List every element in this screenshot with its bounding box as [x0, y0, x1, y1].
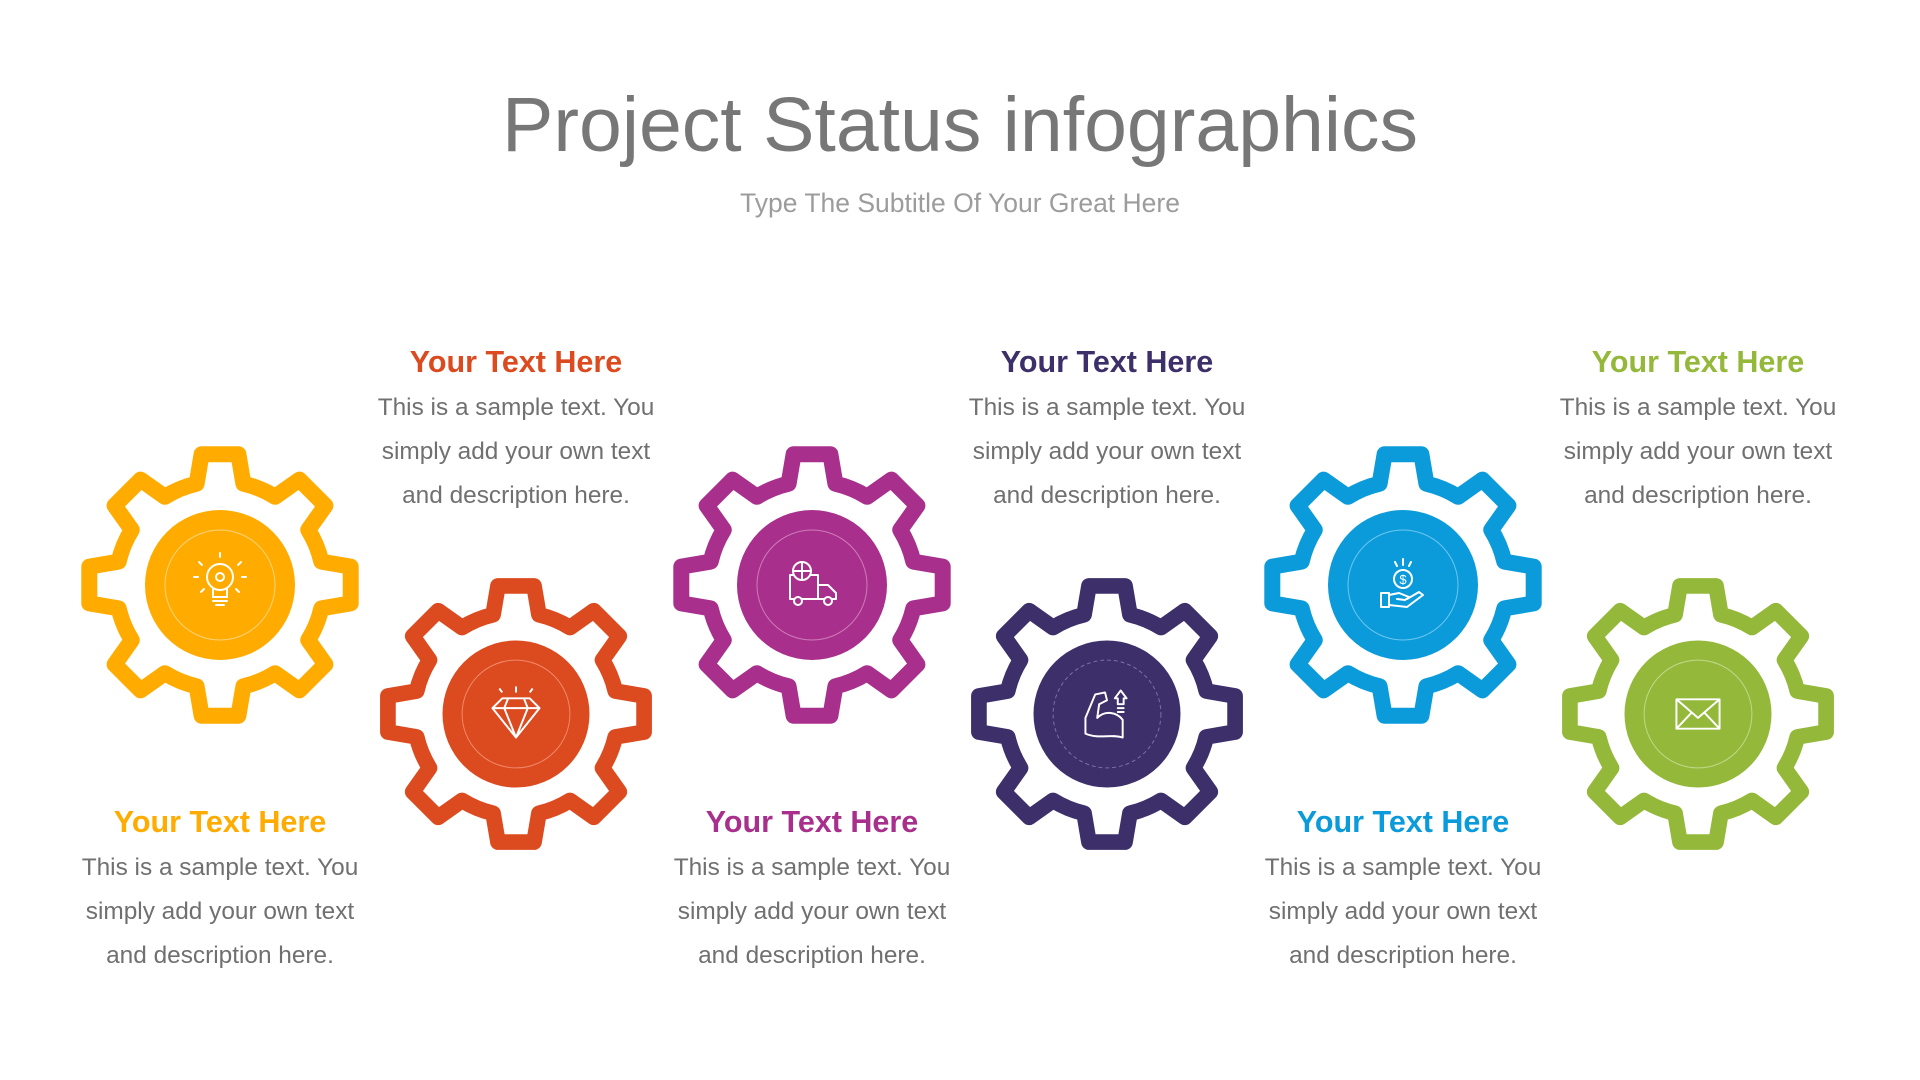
icon: lightbulb	[194, 553, 246, 605]
text block: yellow (bottom): and description here.	[106, 942, 334, 969]
text block: purple (bottom): This is a sample text. You	[674, 854, 950, 881]
title: Project Status infographics	[502, 82, 1418, 168]
text block: red (top)	[378, 345, 654, 509]
gear 6: green envelope	[1570, 586, 1826, 842]
text block: blue (bottom): and description here.	[1289, 942, 1517, 969]
text block: green (top): simply add your own text	[1564, 438, 1832, 465]
icon: diamond	[492, 687, 540, 738]
text block: purple (bottom): simply add your own text	[678, 898, 946, 925]
subtitle: Type The Subtitle Of Your Great Here	[740, 188, 1180, 218]
gear 4: dark purple arm	[979, 586, 1235, 842]
text block: green (top)	[1560, 345, 1836, 509]
text block: yellow (bottom)	[82, 805, 358, 969]
text block: purple (bottom): Your Text Here	[706, 805, 918, 839]
text block: yellow (bottom): This is a sample text. You	[82, 854, 358, 881]
gear 1: yellow lightbulb	[89, 454, 351, 716]
text block: blue (bottom): This is a sample text. You	[1265, 854, 1541, 881]
text block: yellow (bottom): simply add your own text	[86, 898, 354, 925]
text block: red (top): simply add your own text	[382, 438, 650, 465]
text block: red (top): This is a sample text. You	[378, 394, 654, 421]
icon: hand with coin	[1381, 559, 1423, 607]
icon: hand with coin: $	[1399, 572, 1407, 587]
text block: yellow (bottom): Your Text Here	[114, 805, 326, 839]
gear 2: red diamond	[388, 586, 644, 842]
text block: dark purple (top): and description here.	[993, 482, 1221, 509]
text block: dark purple (top): This is a sample text. You	[969, 394, 1245, 421]
gear 3: purple truck	[681, 454, 943, 716]
text block: dark purple (top): Your Text Here	[1001, 345, 1213, 379]
icon: envelope	[1676, 699, 1720, 729]
text block: dark purple (top): simply add your own text	[973, 438, 1241, 465]
text block: blue (bottom): simply add your own text	[1269, 898, 1537, 925]
text block: blue (bottom): Your Text Here	[1297, 805, 1509, 839]
icon: delivery truck	[790, 562, 836, 605]
text block: blue (bottom)	[1265, 805, 1541, 969]
text block: green (top): This is a sample text. You	[1560, 394, 1836, 421]
text block: purple (bottom): and description here.	[698, 942, 926, 969]
text block: red (top): and description here.	[402, 482, 630, 509]
text block: dark purple (top)	[969, 345, 1245, 509]
gear 5: blue money hand	[1272, 454, 1534, 716]
text block: purple (bottom)	[674, 805, 950, 969]
icon: flexed arm	[1085, 690, 1127, 738]
text block: green (top): and description here.	[1584, 482, 1812, 509]
text block: red (top): Your Text Here	[410, 345, 622, 379]
text block: green (top): Your Text Here	[1592, 345, 1804, 379]
